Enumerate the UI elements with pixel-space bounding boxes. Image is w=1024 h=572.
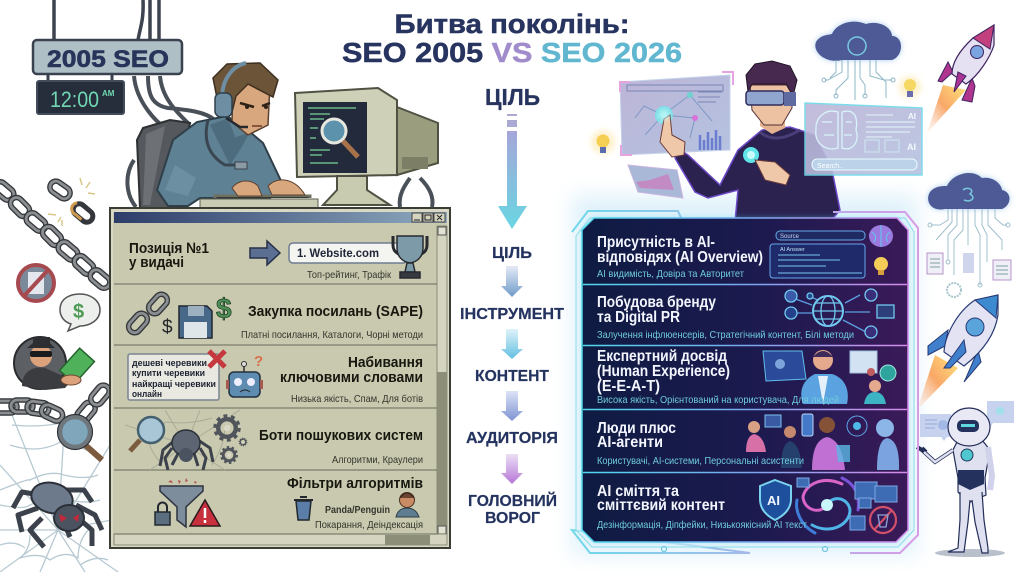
center column: comparison flow [460, 84, 564, 527]
row: AI overview presence: Присутність в AI- [597, 234, 715, 251]
shirt [157, 116, 282, 206]
frame outline [572, 211, 918, 553]
icon: floppy disk [179, 306, 212, 338]
row: AI slop: сміттєвий контент [597, 497, 725, 514]
icon: bulb left [591, 130, 615, 154]
icon: stressed person [396, 492, 419, 517]
hands [660, 115, 685, 157]
icon: chain link [126, 292, 170, 335]
keyword note: найкращі черевики [132, 379, 216, 389]
row: AI slop: Дезінформація, Діпфейки, Низькоякісний AI текст [597, 519, 807, 531]
headset [222, 63, 246, 98]
row: AI slop: AI сміття та [597, 483, 679, 500]
panel: 2005 SEO retro window [110, 208, 450, 548]
label: main enemy: ВОРОГ [485, 510, 540, 527]
right holographic AI screen [805, 103, 922, 175]
neck and face [760, 108, 785, 134]
AI answer mock [770, 231, 865, 278]
row: people plus AI agents: Користувачі, AI-системи, Персональні асистенти [597, 455, 804, 467]
robot assistant [917, 401, 1014, 557]
2005 SEO hanging sign [33, 0, 182, 74]
row: keyword stuffing: ? [254, 353, 263, 370]
chain with magnifier [0, 383, 112, 460]
keyword note: купити черевики [132, 368, 205, 378]
row: expert experience: Висока якість, Орієнтований на користувача, Для людей [597, 394, 839, 406]
row: AI overview presence: AI видимість, Довіра та Авторитет [597, 268, 744, 280]
right holographic AI screen: Search.. [817, 163, 843, 170]
arrow 3 [501, 391, 523, 421]
icon: bulb [874, 257, 888, 275]
row: position 1: у видачі [129, 254, 184, 271]
speech bubbles [920, 401, 1014, 441]
row: link buying: Платні посилання, Каталоги, Чорні методи [241, 329, 423, 341]
arrow 1 [501, 266, 523, 297]
label: main enemy: ГОЛОВНИЙ [468, 491, 557, 510]
row: link buying [126, 292, 423, 341]
row: search bots [125, 410, 423, 470]
icon: trash can [294, 497, 313, 520]
right holographic AI screen: AI [907, 142, 916, 152]
window title bar [114, 212, 447, 223]
row: algorithm filters: Фільтри алгоритмів [287, 475, 423, 492]
top right holographic screen [620, 72, 733, 198]
row: keyword stuffing: Набивання [348, 354, 423, 371]
keyword note: дешеві черевики [132, 358, 207, 368]
row: expert experience: Експертний досвід [597, 348, 727, 365]
row: AI overview presence [597, 225, 893, 280]
right holographic AI screen: AI [908, 112, 916, 121]
panel: 2026 SEO futuristic frame [572, 211, 918, 553]
row: expert experience [597, 348, 896, 406]
label: tool: ІНСТРУМЕНТ [460, 306, 564, 323]
row: keyword stuffing [128, 351, 423, 405]
icon: arrow [250, 241, 280, 265]
icon: thief selling links [14, 337, 94, 390]
web background [125, 410, 240, 470]
arrow 2 [501, 329, 523, 359]
icon: AI shield: AI [767, 493, 780, 508]
AI answer mock: AI Answer [780, 247, 805, 253]
icon: warning [190, 500, 220, 526]
row: algorithm filters: Покарання, Деіндексація [315, 519, 423, 531]
row: AI slop [597, 478, 897, 533]
icon: brain [869, 225, 893, 247]
icon: money speech bubble [60, 294, 100, 331]
row: people plus AI agents [597, 414, 899, 470]
icon: trophy [393, 236, 427, 278]
row: algorithm filters: Panda/Penguin [325, 504, 390, 516]
row: brand and digital PR [597, 289, 894, 341]
people and robot [746, 414, 899, 470]
label: goal: ЦІЛЬ [492, 245, 532, 262]
spiral [797, 478, 858, 533]
globe network [785, 289, 894, 338]
icon: lock [155, 502, 170, 525]
CRT monitor [295, 88, 438, 205]
digital clock [37, 74, 124, 114]
icon: blue rocket [917, 295, 998, 410]
row: brand and digital PR: Побудова бренду [597, 294, 716, 311]
2005 SEO hanging sign: 2005 SEO [47, 46, 169, 73]
icon: funnel [160, 478, 203, 527]
row: people plus AI agents: AI-агенти [597, 434, 663, 451]
second cloud with documents [927, 173, 1011, 297]
big arrow [498, 114, 527, 229]
icon: red-eyed spider [13, 478, 102, 547]
search result box: 1. Website.com [297, 248, 379, 260]
icon: money speech bubble: $ [73, 301, 84, 323]
row: expert experience: (Human Experience) [597, 363, 730, 380]
icon: confused robot [226, 362, 263, 397]
digital clock: AM [102, 89, 115, 98]
row: search bots: Боти пошукових систем [259, 427, 423, 444]
row: brand and digital PR: та Digital PR [597, 309, 680, 326]
cables [127, 76, 433, 207]
scrollbars [114, 226, 447, 545]
icon: no trash [870, 507, 896, 533]
icon: spider bot [160, 430, 213, 470]
developer at his desk [137, 63, 318, 208]
icon: bulb right [899, 76, 921, 98]
row: search bots: Алгоритми, Краулери [332, 454, 423, 466]
row: position 1 [129, 236, 427, 281]
row: people plus AI agents: Люди плюс [597, 420, 676, 437]
title: Битва поколінь: [394, 9, 630, 39]
top cloud with circuit traces [815, 22, 901, 100]
row: algorithm filters [155, 475, 423, 531]
row: link buying: Закупка посилань (SAPE) [248, 303, 423, 320]
heading: goal: ЦІЛЬ [485, 84, 540, 110]
row: link buying: $ [162, 317, 173, 338]
icon: green dollar: $ [216, 293, 232, 324]
torso and arms [675, 127, 840, 222]
head [232, 83, 270, 135]
search result box [289, 243, 407, 263]
man in VR glasses [659, 61, 840, 222]
VR visor [746, 91, 784, 105]
icon: prohibited document [18, 265, 54, 301]
icon: AI shield [760, 480, 791, 520]
robot body [953, 440, 990, 503]
row: AI overview presence: відповідях (AI Overview) [597, 249, 763, 266]
icon: pink rocket [927, 25, 994, 133]
floating documents [797, 478, 897, 530]
row: keyword stuffing: ключовими словами [280, 369, 423, 386]
row: expert experience: (E-E-A-T) [597, 378, 660, 395]
keyword note: онлайн [132, 389, 162, 399]
row: keyword stuffing: Низька якість, Спам, Для ботів [291, 393, 423, 405]
row: brand and digital PR: Залучення інфлюенсерів, Стратегічний контент, Білі методи [597, 329, 854, 341]
icon: red cross [209, 351, 225, 367]
icon: gears [215, 416, 247, 463]
label: audience: АУДИТОРІЯ [466, 430, 558, 447]
label: main enemy [468, 491, 557, 527]
hands and keyboard [200, 199, 318, 208]
title: SEO 2005 VS SEO 2026 [342, 37, 682, 68]
row: position 1: Топ-рейтинг, Трафік [307, 269, 391, 281]
title [342, 9, 682, 68]
chain with broken link and sparks [0, 178, 112, 291]
hair [746, 61, 797, 96]
office chair [137, 120, 190, 208]
AI answer mock: Source [780, 234, 800, 240]
icon: magnifier [130, 417, 164, 451]
expert illustration [763, 350, 896, 404]
keyword note [128, 354, 219, 400]
digital clock: 12:00 [50, 87, 99, 112]
row: position 1: Позиція №1 [129, 240, 209, 257]
cobweb [0, 410, 118, 572]
label: content: КОНТЕНТ [475, 368, 549, 385]
arrow 4 [501, 454, 523, 484]
